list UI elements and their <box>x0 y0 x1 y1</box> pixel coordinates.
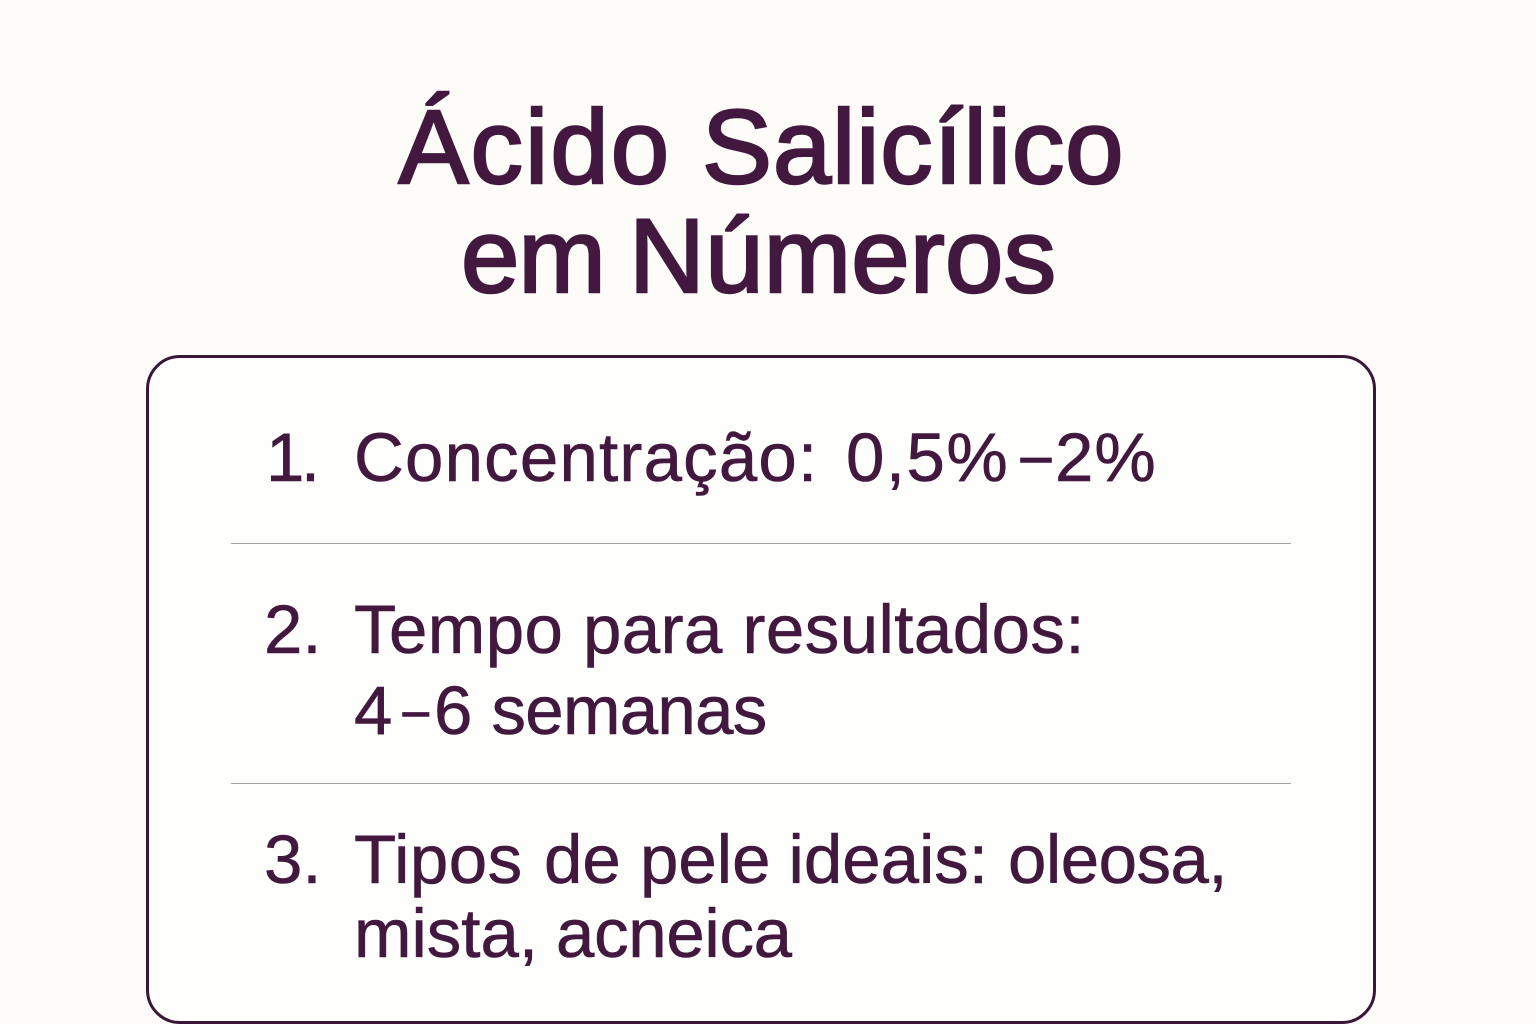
item 3: ideal skin types: ideais: <box>788 821 988 898</box>
item 2: time to results: semanas <box>492 672 767 749</box>
title: Ácido <box>398 89 671 206</box>
title <box>397 89 1124 315</box>
item 2: time to results: Tempo para resultados: <box>354 591 1085 668</box>
item 1: concentration: 2% <box>1055 419 1157 496</box>
item 3: ideal skin types: mista, <box>354 895 538 972</box>
item 3: ideal skin types: de <box>544 821 621 898</box>
item 3: ideal skin types: acneica <box>556 895 792 972</box>
item 3: ideal skin types: oleosa, <box>1008 821 1227 898</box>
item 1: concentration: Concentração: <box>354 419 818 496</box>
item 3: ideal skin types: 3. <box>264 821 322 898</box>
item 3: ideal skin types: Tipos <box>354 821 523 898</box>
item 1: concentration: 0,5% <box>846 419 1009 496</box>
item 1: concentration <box>266 419 1157 496</box>
title: Salicílico <box>702 89 1124 206</box>
item 1: concentration: 1. <box>266 419 317 496</box>
title: Números <box>629 198 1056 315</box>
item 2: time to results: 6 <box>434 672 472 749</box>
item 1: concentration: – <box>1021 426 1051 486</box>
item 2: time to results: 2. <box>264 591 322 668</box>
item 2: time to results <box>264 591 1085 749</box>
panel: list of figures <box>146 355 1376 1024</box>
item 2: time to results: 4 <box>354 672 392 749</box>
item 3: ideal skin types <box>264 821 1227 972</box>
item 3: ideal skin types: pele <box>640 821 770 898</box>
title: em <box>461 198 605 315</box>
item 2: time to results: – <box>403 684 429 736</box>
